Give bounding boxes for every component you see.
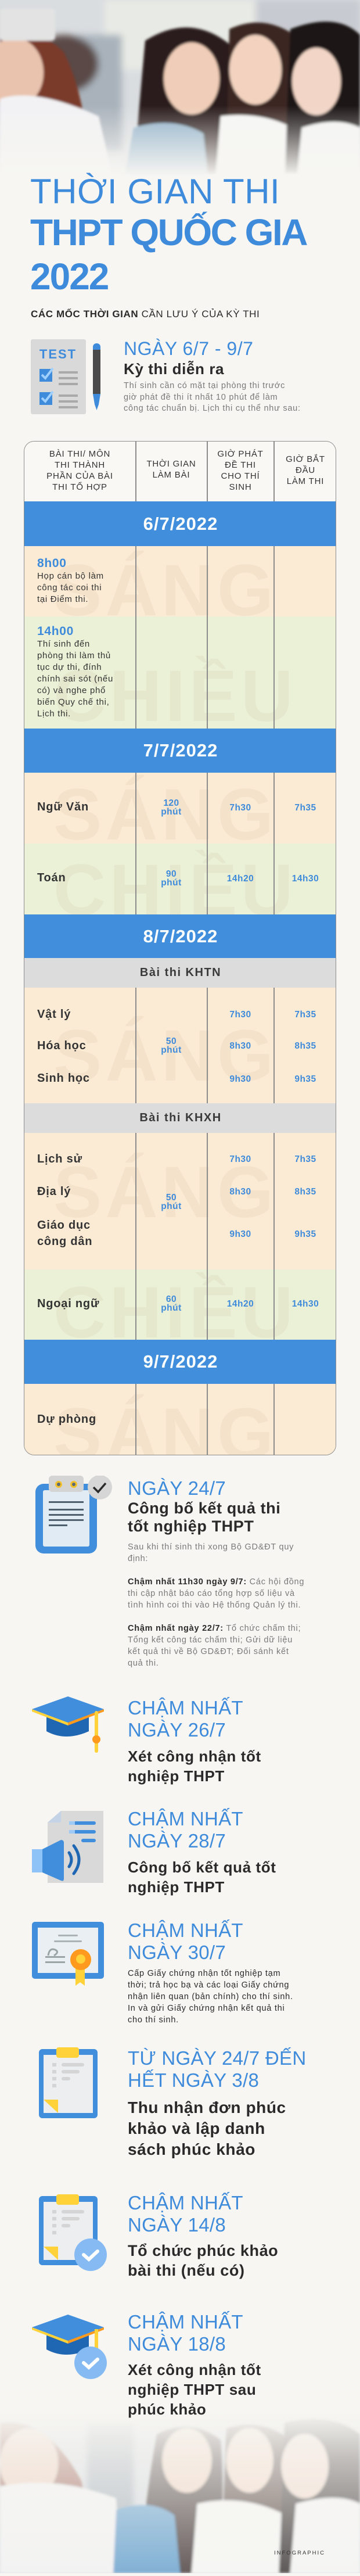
rows KHXH: 7h35	[294, 1154, 316, 1164]
section: 26/7	[128, 1697, 261, 1785]
table header: BÀI THI/ MÔN	[49, 449, 110, 459]
section: 30/7: cho thí sinh.	[128, 2015, 179, 2025]
bottom photo	[0, 2420, 360, 2573]
section: 18/8: Xét công nhận tốt	[128, 2361, 261, 2378]
row Toán: Toán	[37, 871, 66, 884]
table: exam schedule	[24, 441, 336, 1455]
section: 14/8: CHẬM NHẤT	[128, 2192, 243, 2213]
table header: THI TỔ HỢP	[52, 482, 107, 492]
band 6/7/2022: 6/7/2022	[143, 514, 218, 534]
row Ngoại ngữ: 14h30	[292, 1299, 319, 1309]
row 8h00: 8h00	[37, 557, 67, 570]
row 14h00: biến Quy chế thi,	[37, 697, 109, 707]
rows KHXH: Lịch sử	[37, 1153, 82, 1165]
table header: ĐỀ THI	[225, 460, 256, 470]
section: 30/7: nhận liên quan (bản chính) cho thí sinh.	[128, 1992, 293, 2001]
band 9/7/2022	[24, 1340, 337, 1384]
section: 30/7: CHẬM NHẤT	[128, 1920, 243, 1941]
row Ngữ Văn: 7h35	[294, 803, 316, 813]
rows KHXH: 7h30	[229, 1154, 251, 1164]
rows KHTN	[24, 988, 337, 1103]
section: 24/7 results announcement: Tổng kết công tác chấm thi; Gửi dữ liệu	[128, 1635, 293, 1645]
band 8/7/2022: 8/7/2022	[143, 926, 218, 946]
row Toán: phút	[161, 878, 182, 888]
rows KHXH	[24, 1133, 337, 1269]
intro: exam dates: NGÀY 6/7 - 9/7	[124, 338, 253, 359]
row Ngữ Văn: Ngữ Văn	[37, 801, 89, 813]
section: 24/7 results announcement: Chậm nhất 11h30 ngày 9/7: Các hội đồng	[128, 1577, 304, 1587]
rows KHTN: Hóa học	[37, 1039, 86, 1052]
table header: GIỜ BẮT	[286, 454, 325, 464]
section: 30/7: NGÀY 30/7	[128, 1942, 226, 1963]
section: 14/8	[128, 2192, 278, 2279]
table header: ĐẦU	[296, 465, 315, 475]
rows KHTN: Sinh học	[37, 1072, 90, 1085]
section: 28/7: Công bố kết quả tốt	[128, 1859, 276, 1876]
table header: CHO THÍ	[221, 471, 260, 481]
table header	[24, 442, 337, 501]
section: 18/8: CHẬM NHẤT	[128, 2311, 243, 2333]
rows KHXH: 9h35	[294, 1229, 316, 1239]
subheading KHTN: Bài thi KHTN	[140, 966, 221, 979]
section: 24/7 to 3/8: Thu nhận đơn phúc	[128, 2098, 286, 2116]
icon: test sheet and pencil	[31, 339, 100, 414]
section: 24/7 results announcement: thi cập nhật báo cáo tổng hợp số liệu và	[128, 1589, 295, 1598]
rows KHXH: 8h30	[229, 1187, 251, 1197]
table header: LÀM THI	[287, 476, 324, 486]
band 7/7/2022	[24, 729, 337, 773]
row 14h00: tục dự thi, đính	[37, 662, 102, 672]
rows KHXH: phút	[161, 1201, 182, 1211]
table header: THỜI GIAN	[146, 459, 196, 469]
row 14h00: Thí sinh đến	[37, 639, 90, 649]
title: 2022	[30, 256, 108, 297]
row Toán: 14h30	[292, 874, 319, 884]
section: 24/7 to 3/8: HẾT NGÀY 3/8	[128, 2069, 259, 2091]
section: 24/7 results announcement: Chậm nhất ngày 22/7: Tổ chức chấm thi;	[128, 1624, 301, 1633]
section: 28/7: nghiệp THPT	[128, 1878, 225, 1896]
icon: clipboard with check badge	[39, 2194, 107, 2271]
title: THPT QUỐC GIA	[30, 211, 307, 253]
rows KHXH: công dân	[37, 1235, 92, 1248]
rows KHTN: 8h30	[229, 1041, 251, 1051]
section: 28/7: CHẬM NHẤT	[128, 1808, 243, 1829]
section: 24/7 results announcement: tình hình coi thi vào Hệ thống Quản lý thi.	[128, 1601, 301, 1610]
footer label: INFOGRAPHIC	[274, 2550, 325, 2556]
rows KHTN: 7h30	[229, 1010, 251, 1020]
row 8h00: công tác coi thi	[37, 583, 102, 593]
subheading KHTN	[24, 958, 337, 988]
icon: certificate	[32, 1922, 104, 1986]
row Dự phòng	[24, 1384, 337, 1456]
table header: SINH	[229, 482, 252, 492]
row 14h00: có) và nghe phổ	[37, 686, 106, 695]
icon: clipboard with check	[35, 1476, 112, 1554]
table header: PHẦN CỦA BÀI	[46, 471, 113, 481]
band 6/7/2022	[24, 501, 337, 546]
row Ngoại ngữ: 14h20	[227, 1299, 254, 1309]
rows KHTN: SÁNG	[53, 1016, 277, 1096]
intro: exam dates: Kỳ thi diễn ra	[124, 360, 224, 378]
rows KHTN: 8h35	[294, 1041, 316, 1051]
row Ngữ Văn	[24, 773, 337, 844]
row Ngoại ngữ: Ngoại ngữ	[37, 1297, 99, 1310]
rows KHTN: 9h35	[294, 1074, 316, 1084]
title: THỜI GIAN THI	[30, 172, 280, 211]
section: 24/7 results announcement: định:	[128, 1554, 148, 1563]
section: 30/7	[128, 1920, 293, 2025]
icon: clipboard list	[39, 2047, 98, 2118]
section: 26/7: nghiệp THPT	[128, 1767, 225, 1785]
row Ngữ Văn: phút	[161, 807, 182, 817]
intro: exam dates	[124, 338, 301, 413]
band 8/7/2022	[24, 914, 337, 958]
section: 26/7: Xét công nhận tốt	[128, 1748, 261, 1765]
row Toán: 14h20	[227, 874, 254, 884]
section: 24/7 results announcement: Sau khi thí sinh thi xong Bộ GD&ĐT quy	[128, 1542, 294, 1552]
icon: graduation cap	[32, 1696, 104, 1753]
row 14h00: phòng thi làm thủ	[37, 651, 111, 661]
band 7/7/2022: 7/7/2022	[143, 740, 218, 760]
section: 30/7: thời; trả học bạ và các loại Giấy chứng	[128, 1981, 289, 1990]
intro: exam dates: Thí sinh cần có mặt tại phòng thi trước	[124, 381, 285, 390]
section: 14/8: Tổ chức phúc khảo	[128, 2242, 278, 2259]
section: 24/7 to 3/8	[128, 2047, 306, 2158]
row Ngoại ngữ: 60	[166, 1294, 177, 1304]
rows KHXH: Địa lý	[37, 1185, 71, 1198]
subtitle: CÁC MỐC THỜI GIAN CẦN LƯU Ý CỦA KỲ THI	[31, 308, 260, 320]
rows KHXH: 8h35	[294, 1187, 316, 1197]
section: 24/7 to 3/8: sách phúc khảo	[128, 2140, 255, 2158]
section: 24/7 to 3/8: TỪ NGÀY 24/7 ĐẾN	[128, 2047, 306, 2069]
intro: exam dates: công tác chuẩn bị. Lịch thi cụ thể như sau:	[124, 404, 301, 413]
row 14h00: 14h00	[37, 625, 74, 638]
section: 18/8: nghiệp THPT sau	[128, 2381, 256, 2398]
rows KHTN: 50	[166, 1036, 177, 1046]
row 14h00	[24, 616, 337, 729]
section: 24/7 to 3/8: khảo và lập danh	[128, 2119, 265, 2137]
section: 24/7 results announcement: quả thi.	[128, 1659, 159, 1668]
section: 14/8: bài thi (nếu có)	[128, 2262, 245, 2279]
row 8h00	[24, 546, 337, 616]
rows KHXH: SÁNG	[53, 1152, 277, 1233]
subheading KHXH	[24, 1103, 337, 1133]
subheading KHXH: Bài thi KHXH	[139, 1111, 222, 1124]
row Dự phòng: Dự phòng	[37, 1413, 96, 1426]
section: 14/8: NGÀY 14/8	[128, 2214, 226, 2236]
section: 24/7 results announcement	[128, 1477, 304, 1668]
row 8h00: Họp cán bộ làm	[37, 571, 104, 581]
rows KHXH: 50	[166, 1193, 177, 1203]
row Ngoại ngữ: phút	[161, 1303, 182, 1313]
intro: exam dates: giờ phát đề thi ít nhất 10 phút để làm	[124, 393, 278, 402]
section: 18/8: phúc khảo	[128, 2401, 206, 2418]
section: 28/7	[128, 1808, 276, 1896]
table header: GIỜ PHÁT	[217, 449, 264, 459]
row Ngữ Văn: 7h30	[229, 803, 251, 813]
band 9/7/2022: 9/7/2022	[143, 1351, 218, 1372]
section: 26/7: CHẬM NHẤT	[128, 1697, 243, 1718]
table header: LÀM BÀI	[153, 470, 190, 480]
table header: THI THÀNH	[55, 460, 105, 470]
section: 24/7 results announcement: NGÀY 24/7	[128, 1477, 226, 1499]
icon: graduation cap with check	[32, 2315, 107, 2379]
section: 18/8	[128, 2311, 261, 2418]
section: 30/7: In và gửi Giấy chứng nhận kết quả thi	[128, 2004, 285, 2013]
section: 28/7: NGÀY 28/7	[128, 1830, 226, 1852]
section: 24/7 results announcement: Công bố kết quả thi	[128, 1499, 280, 1517]
top photo	[0, 0, 360, 173]
icon: speaker document	[32, 1811, 103, 1883]
rows KHTN: 7h35	[294, 1010, 316, 1020]
section: 24/7 results announcement: tốt nghiệp THPT	[128, 1517, 254, 1535]
row Toán: 90	[166, 869, 177, 879]
icon: test sheet and pencil: TEST	[39, 347, 77, 361]
rows KHXH: Giáo dục	[37, 1219, 91, 1232]
section: 30/7: Cấp Giấy chứng nhận tốt nghiệp tạm	[128, 1969, 280, 1978]
row 14h00: chính sai sót (nếu	[37, 674, 113, 684]
section: 18/8: NGÀY 18/8	[128, 2333, 226, 2355]
row 14h00: Lịch thi.	[37, 709, 71, 719]
section: 26/7: NGÀY 26/7	[128, 1719, 226, 1741]
rows KHTN: 9h30	[229, 1074, 251, 1084]
title	[30, 172, 307, 297]
row 8h00: tại Điểm thi.	[37, 594, 88, 604]
rows KHTN: phút	[161, 1045, 182, 1055]
row Ngữ Văn: 120	[163, 798, 179, 808]
rows KHTN: Vật lý	[37, 1008, 71, 1021]
rows KHXH: 9h30	[229, 1229, 251, 1239]
section: 24/7 results announcement: kết quả thi về Bộ GD&ĐT; Đối sánh kết	[128, 1647, 289, 1656]
